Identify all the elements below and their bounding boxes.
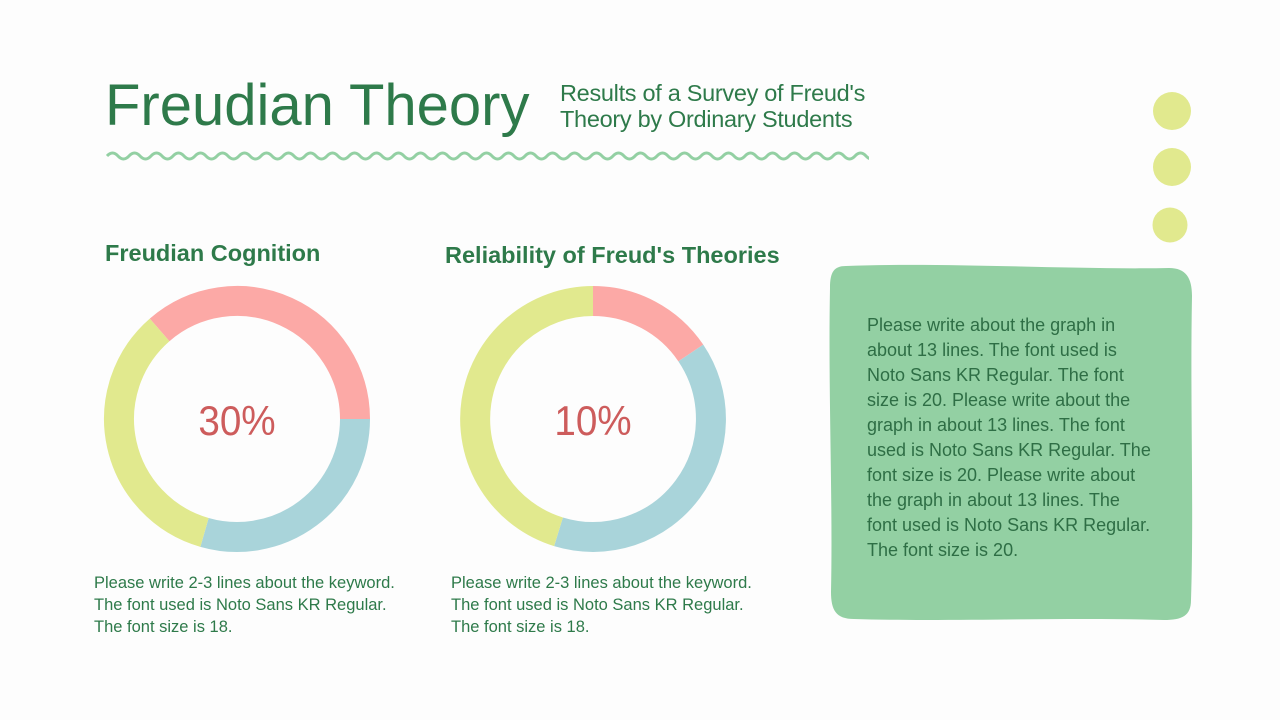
caption 1: Please write 2-3 lines about the keyword. xyxy=(94,574,395,592)
subtitle: Results of a Survey of Freud's xyxy=(560,80,865,106)
decorative dots xyxy=(1152,92,1191,242)
subtitle: Theory by Ordinary Students xyxy=(560,106,852,132)
panel text: Please write about the graph in about 13 lines. The font used is Noto Sans KR Regular. The font size is 20. Please write about the graph in about 13 lines. The font used is Noto Sans KR Regular. The font size is 20. Please write about the graph in about 13 lines. The font used is Noto Sans KR Regular. The font size is 20. xyxy=(867,315,1151,560)
caption 1: The font used is Noto Sans KR Regular. xyxy=(94,596,387,614)
caption 2: The font used is Noto Sans KR Regular. xyxy=(451,596,744,614)
heading: Freudian Cognition: Freudian Cognition xyxy=(105,240,320,266)
caption 2: Please write 2-3 lines about the keyword. xyxy=(451,574,752,592)
donut chart 1: 30% xyxy=(198,396,276,444)
donut chart 2: 10% xyxy=(554,396,632,444)
caption 2: The font size is 18. xyxy=(451,618,590,636)
caption 1 xyxy=(94,574,395,636)
caption 2 xyxy=(451,574,752,636)
subtitle xyxy=(560,80,865,132)
caption 1: The font size is 18. xyxy=(94,618,232,636)
text panel xyxy=(830,264,1192,620)
donut chart 1 xyxy=(104,286,370,552)
wavy underline xyxy=(106,152,869,160)
title: Freudian Theory xyxy=(105,73,530,138)
heading: Reliability: Reliability of Freud's Theories xyxy=(445,242,780,268)
donut chart 2 xyxy=(460,286,726,552)
